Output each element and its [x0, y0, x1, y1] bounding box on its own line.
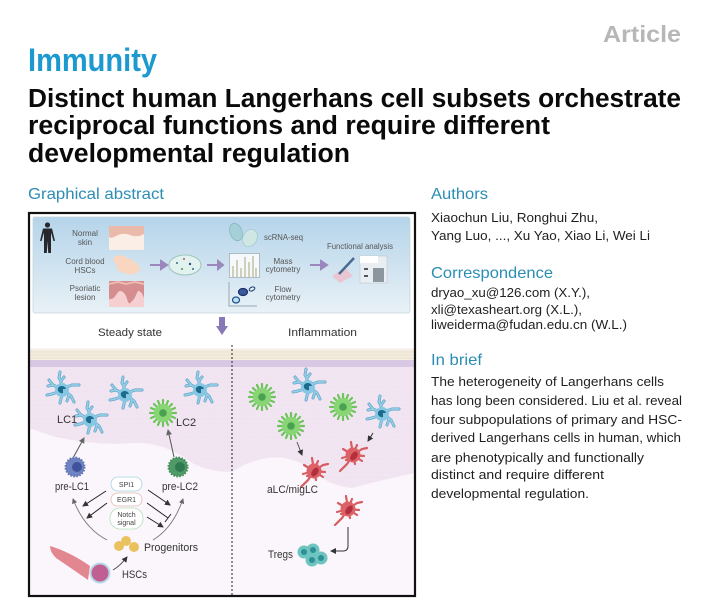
in brief section: distinct and require different [431, 467, 604, 482]
LC2 label: LC2 [176, 417, 196, 429]
cell: LC2 [330, 394, 356, 420]
article label: Article [603, 21, 681, 47]
icon: psoriatic lesion [109, 281, 144, 307]
pill: Notch signal: Notch [117, 512, 136, 519]
article title: developmental regulation [28, 140, 350, 168]
pill: EGR1 [111, 493, 142, 506]
icon: blood vessel [50, 546, 90, 580]
chart: flow cytometry [229, 282, 257, 306]
pre-LC1 label: pre-LC1 [55, 481, 89, 493]
panel: inflammation cells [249, 369, 399, 566]
pill: SPI1: SPI1 [119, 482, 134, 489]
cell: migratory LC [335, 496, 362, 525]
pre-LC2 label: pre-LC2 [162, 481, 198, 493]
mass cytometry label: Mass [273, 257, 293, 266]
article title [28, 85, 681, 168]
cell: LC [47, 372, 79, 403]
chart: mass cytometry [230, 254, 260, 278]
in brief section: are phenotypically and functionally [431, 450, 645, 465]
cell: activated LC [301, 458, 328, 487]
functional analysis label: Functional analysis [327, 242, 393, 251]
icon: cell dish [169, 255, 201, 275]
cell: LC1 [75, 402, 107, 433]
cell: LC2 [278, 413, 304, 439]
HSCs label: HSCs [122, 569, 147, 581]
icon: normal skin [109, 226, 144, 250]
correspondence section: xli@texasheart.org (X.L.), [431, 302, 582, 317]
cells: Tregs [298, 544, 328, 566]
figure frame [29, 213, 415, 596]
in brief section: has long been considered. Liu et al. reveal [431, 393, 682, 408]
in brief section [431, 352, 682, 501]
in brief section: derived Langerhans cells in human, which [431, 430, 681, 445]
differentiation arrows [73, 499, 183, 540]
in brief section: developmental regulation. [431, 486, 589, 501]
sample labels: Psoriatic [70, 284, 100, 293]
cell: LC2 [249, 384, 275, 410]
sample labels [65, 229, 105, 302]
cell: HSC [90, 562, 110, 584]
article title: Distinct human Langerhans cell subsets orchestrate [28, 85, 681, 113]
correspondence section: Correspondence [431, 265, 553, 282]
correspondence section [431, 265, 627, 332]
cell: LC [185, 372, 217, 403]
arrow [150, 261, 167, 269]
correspondence section: liweiderma@fudan.edu.cn (W.L.) [431, 317, 627, 332]
sample labels: skin [78, 238, 92, 247]
flow cytometry label second line: cytometry [266, 293, 300, 302]
scRNA-seq label: scRNA-seq [264, 233, 303, 242]
icon: scRNA-seq [227, 221, 260, 249]
arrow to progenitors [113, 557, 127, 570]
cells: progenitors [114, 536, 139, 552]
sample labels: HSCs [75, 266, 95, 275]
panel: skin tissue [29, 348, 415, 596]
correspondence section: dryao_xu@126.com (X.Y.), [431, 285, 590, 300]
pill: SPI1 [111, 477, 142, 491]
graphical abstract figure [29, 213, 415, 596]
cell: pre-LC2 [168, 458, 188, 476]
arrow to LC1 [73, 438, 84, 458]
aLC/migLC label: aLC/migLC [267, 484, 318, 496]
arrow: down [216, 317, 228, 335]
authors section: Yang Luo, ..., Xu Yao, Xiao Li, Wei Li [431, 228, 650, 243]
authors section [431, 186, 650, 243]
regulatory arrows [83, 490, 171, 527]
in brief section: four subpopulations of primary and HSC- [431, 412, 682, 427]
cell: LC [110, 377, 142, 408]
cell: pre-LC1 [66, 458, 84, 476]
inflammation heading: Inflammation [288, 327, 357, 339]
icon: analyser machine [360, 256, 387, 283]
panel: steady state cells [47, 372, 217, 584]
divider between states [231, 345, 233, 596]
cell: LC [367, 396, 399, 427]
panel: sample and methods [33, 217, 410, 313]
arrow to aLC [368, 433, 373, 441]
icon: human figure [40, 222, 55, 253]
sample labels: Cord blood [65, 257, 105, 266]
Tregs label: Tregs [268, 549, 293, 561]
arrow to aLC [297, 442, 302, 455]
steady state heading: Steady state [98, 327, 162, 339]
pill: EGR1: EGR1 [117, 497, 136, 504]
flow cytometry label: Flow [275, 285, 292, 294]
journal name: Immunity [28, 42, 157, 78]
progenitors label: Progenitors [144, 542, 198, 554]
in brief section: The heterogeneity of Langerhans cells [431, 374, 665, 389]
arrow to LC2 [168, 430, 174, 457]
cell: LC2 [150, 400, 176, 426]
arrow [207, 261, 223, 269]
sample labels: lesion [75, 293, 95, 302]
icon: cord blood tissue [113, 255, 140, 274]
in brief section: In brief [431, 352, 483, 369]
icon: pipette [332, 258, 354, 283]
cell: LC [293, 369, 325, 400]
graphical abstract heading: Graphical abstract [28, 186, 165, 203]
authors section: Xiaochun Liu, Ronghui Zhu, [431, 210, 598, 225]
authors section: Authors [431, 186, 488, 203]
pill: Notch signal: signal [117, 520, 136, 527]
pill: Notch signal [110, 508, 143, 529]
article title: reciprocal functions and require different [28, 112, 551, 140]
LC1 label: LC1 [57, 414, 77, 426]
bent arrow to Tregs [331, 527, 348, 551]
mass cytometry label second line: cytometry [266, 265, 300, 274]
arrow [310, 261, 327, 269]
cell: activated LC [340, 442, 367, 471]
sample labels: Normal [72, 229, 98, 238]
